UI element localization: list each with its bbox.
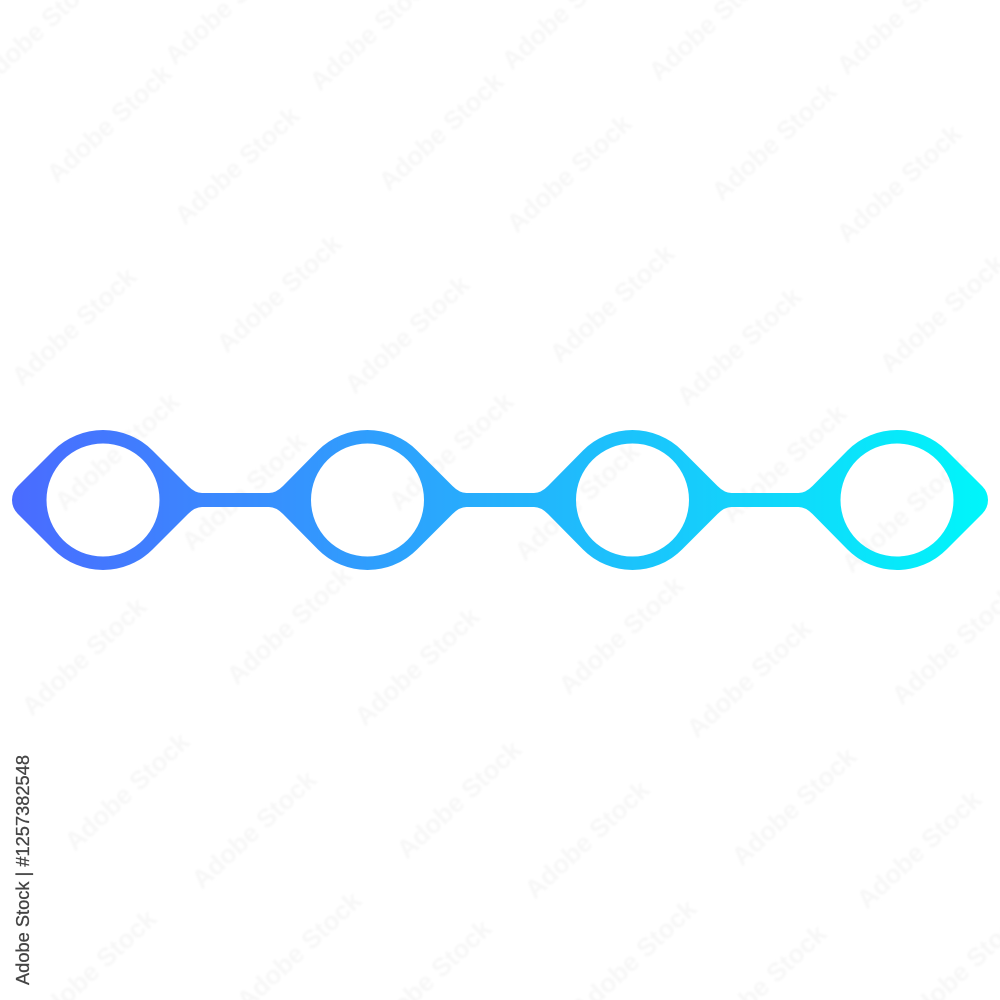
timeline: four linked rings [12,430,988,570]
watermark pattern: Adobe Stock [49,386,186,517]
watermark pattern: Adobe Stock [544,238,681,369]
watermark pattern: Adobe Stock [851,784,988,915]
watermark pattern: Adobe Stock [169,100,306,231]
watermark pattern: Adobe Stock [373,66,510,197]
watermark pattern: Adobe Stock [831,118,968,249]
watermark pattern: Adobe Stock [501,108,638,239]
watermark pattern: Adobe Stock [726,741,863,872]
watermark pattern: Adobe Stock [391,734,528,865]
watermark pattern: Adobe Stock [519,774,656,905]
watermark pattern: Adobe Stock [509,436,646,567]
watermark pattern: Adobe Stock [176,426,313,557]
watermark pattern: Adobe Stock [186,764,323,895]
watermark pattern: Adobe Stock [349,601,486,732]
watermark pattern: Adobe Stock [339,269,476,400]
watermark pattern: Adobe Stock [59,726,196,857]
watermark pattern: Adobe Stock [553,570,690,701]
watermark pattern: Adobe Stock [681,613,818,744]
watermark pattern: Adobe Stock [671,281,808,412]
watermark pattern: Adobe Stock [716,398,853,529]
stock image credit, vertical: Adobe Stock | #1257382548 [13,755,33,985]
watermark pattern: Adobe Stock [836,448,973,579]
watermark pattern: Adobe Stock [221,560,358,691]
watermark pattern: Adobe Stock [383,386,520,517]
watermark pattern: Adobe Stock [6,261,143,392]
watermark pattern: Adobe Stock [706,76,843,207]
watermark pattern: Adobe Stock [41,58,178,189]
watermark pattern: Adobe Stock [211,228,348,359]
watermark pattern: Adobe Stock [16,591,153,722]
